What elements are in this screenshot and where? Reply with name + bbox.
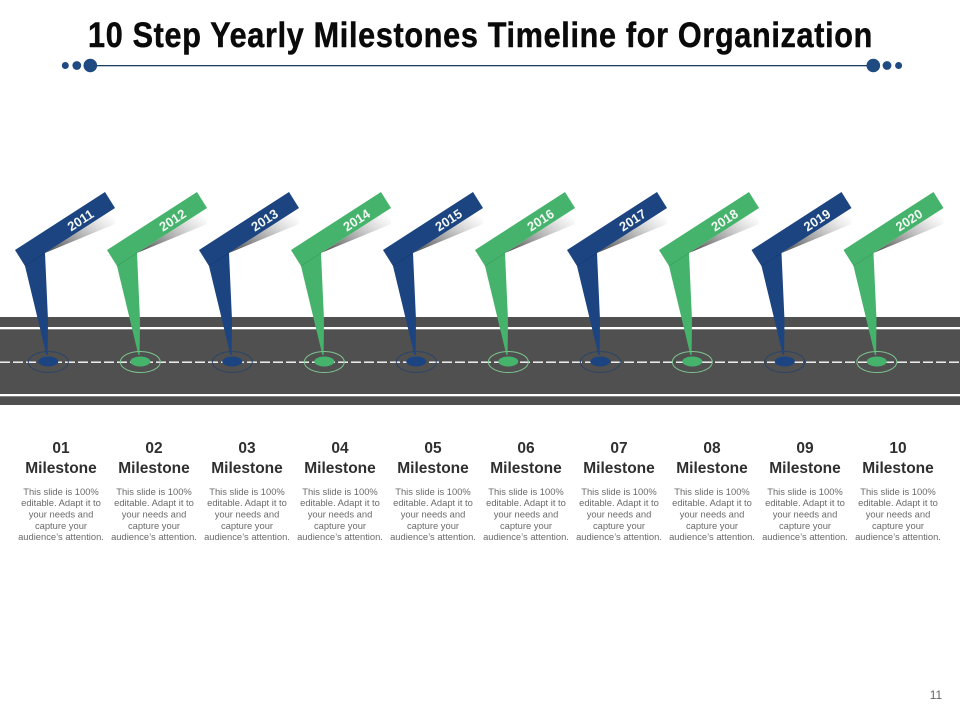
flag 2015: 2015: [432, 206, 465, 234]
flag 2014: [291, 192, 391, 372]
milestone 07 text: [576, 440, 662, 542]
page number: 11: [930, 688, 943, 702]
milestone 04 text: editable. Adapt it to: [300, 497, 380, 508]
milestone 07 text: editable. Adapt it to: [579, 497, 659, 508]
milestone 03 text: 03: [238, 440, 256, 457]
flag 2018: 2018: [708, 206, 741, 234]
milestone 01 text: [18, 440, 104, 542]
milestone 09 text: 09: [796, 440, 814, 457]
milestone 10 text: Milestone: [862, 460, 934, 477]
flag 2016: 2016: [524, 206, 557, 234]
flag 2019: 2019: [801, 206, 833, 234]
milestone 10 text: 10: [889, 440, 907, 457]
milestone 05 text: Milestone: [397, 460, 469, 477]
milestone 09 text: audience’s attention.: [762, 531, 848, 542]
milestone 02 text: your needs and: [122, 508, 186, 520]
milestone 08 text: [669, 440, 755, 542]
flag 2012: [107, 192, 207, 372]
milestone 03 text: audience’s attention.: [204, 531, 290, 542]
milestone 05 text: capture your: [407, 520, 459, 531]
milestone 07 text: This slide is 100%: [581, 486, 657, 497]
milestone 01 text: editable. Adapt it to: [21, 497, 101, 508]
milestone 08 text: editable. Adapt it to: [672, 497, 752, 508]
flag 2013: [199, 192, 299, 372]
milestone 08 text: This slide is 100%: [674, 486, 750, 497]
milestone 04 text: Milestone: [304, 460, 376, 477]
milestone 09 text: your needs and: [773, 508, 837, 520]
milestone 01 text: audience’s attention.: [18, 531, 104, 542]
flag 2015: [383, 192, 483, 372]
milestone 10 text: editable. Adapt it to: [858, 497, 938, 508]
flag 2017: 2017: [616, 206, 649, 234]
milestone 05 text: 05: [424, 440, 442, 457]
milestone 04 text: This slide is 100%: [302, 486, 378, 497]
milestone 09 text: editable. Adapt it to: [765, 497, 845, 508]
milestone 03 text: This slide is 100%: [209, 486, 285, 497]
milestone 04 text: your needs and: [308, 508, 372, 520]
milestone 06 text: audience’s attention.: [483, 531, 569, 542]
milestone 07 text: your needs and: [587, 508, 651, 520]
milestone 08 text: Milestone: [676, 460, 748, 477]
milestone 04 text: [297, 440, 383, 542]
milestone 07 text: capture your: [593, 520, 645, 531]
milestone 03 text: [204, 440, 290, 542]
milestone 02 text: Milestone: [118, 460, 190, 477]
title rule with dots: [62, 59, 902, 72]
milestone 06 text: This slide is 100%: [488, 486, 564, 497]
milestone 01 text: This slide is 100%: [23, 486, 99, 497]
milestone 08 text: capture your: [686, 520, 738, 531]
milestone 09 text: [762, 440, 848, 542]
milestone 06 text: Milestone: [490, 460, 562, 477]
milestone 04 text: audience’s attention.: [297, 531, 383, 542]
flag 2016: [475, 192, 575, 372]
milestone 09 text: This slide is 100%: [767, 486, 843, 497]
milestone 07 text: Milestone: [583, 460, 655, 477]
milestone 06 text: editable. Adapt it to: [486, 497, 566, 508]
milestone 09 text: capture your: [779, 520, 831, 531]
milestone 02 text: [111, 440, 197, 542]
flag 2020: [844, 192, 944, 372]
milestone 06 text: [483, 440, 569, 542]
milestone 05 text: audience’s attention.: [390, 531, 476, 542]
road: [0, 317, 960, 405]
milestone 10 text: [855, 440, 941, 542]
milestone 05 text: editable. Adapt it to: [393, 497, 473, 508]
milestone 03 text: capture your: [221, 520, 273, 531]
milestone 06 text: your needs and: [494, 508, 558, 520]
milestone 08 text: your needs and: [680, 508, 744, 520]
milestone 10 text: audience’s attention.: [855, 531, 941, 542]
flag 2020: 2020: [893, 206, 925, 234]
milestone 07 text: 07: [610, 440, 628, 457]
milestone 10 text: This slide is 100%: [860, 486, 936, 497]
milestone 02 text: 02: [145, 440, 163, 457]
milestone 02 text: capture your: [128, 520, 180, 531]
milestone 06 text: 06: [517, 440, 535, 457]
milestone 02 text: audience’s attention.: [111, 531, 197, 542]
milestone 03 text: your needs and: [215, 508, 279, 520]
flag 2011: [15, 192, 115, 372]
milestone 10 text: capture your: [872, 520, 924, 531]
milestone 08 text: audience’s attention.: [669, 531, 755, 542]
milestone 07 text: audience’s attention.: [576, 531, 662, 542]
flag 2018: [659, 192, 759, 372]
milestone 02 text: This slide is 100%: [116, 486, 192, 497]
milestone 08 text: 08: [703, 440, 721, 457]
flag 2019: [752, 192, 852, 372]
milestone 09 text: Milestone: [769, 460, 841, 477]
flag 2012: 2012: [156, 206, 189, 234]
milestone 03 text: editable. Adapt it to: [207, 497, 287, 508]
flag 2017: [567, 192, 667, 372]
flag 2013: 2013: [248, 206, 281, 234]
flag 2011: 2011: [65, 206, 96, 234]
milestone 01 text: Milestone: [25, 460, 97, 477]
milestone 01 text: capture your: [35, 520, 87, 531]
milestone 10 text: your needs and: [866, 508, 930, 520]
milestone 05 text: This slide is 100%: [395, 486, 471, 497]
milestone 02 text: editable. Adapt it to: [114, 497, 194, 508]
flag 2014: 2014: [340, 206, 373, 234]
milestone 04 text: 04: [331, 440, 349, 457]
milestone 05 text: your needs and: [401, 508, 465, 520]
milestone 05 text: [390, 440, 476, 542]
milestone 04 text: capture your: [314, 520, 366, 531]
milestone 01 text: 01: [52, 440, 70, 457]
milestone 01 text: your needs and: [29, 508, 93, 520]
milestone 03 text: Milestone: [211, 460, 283, 477]
milestone 06 text: capture your: [500, 520, 552, 531]
